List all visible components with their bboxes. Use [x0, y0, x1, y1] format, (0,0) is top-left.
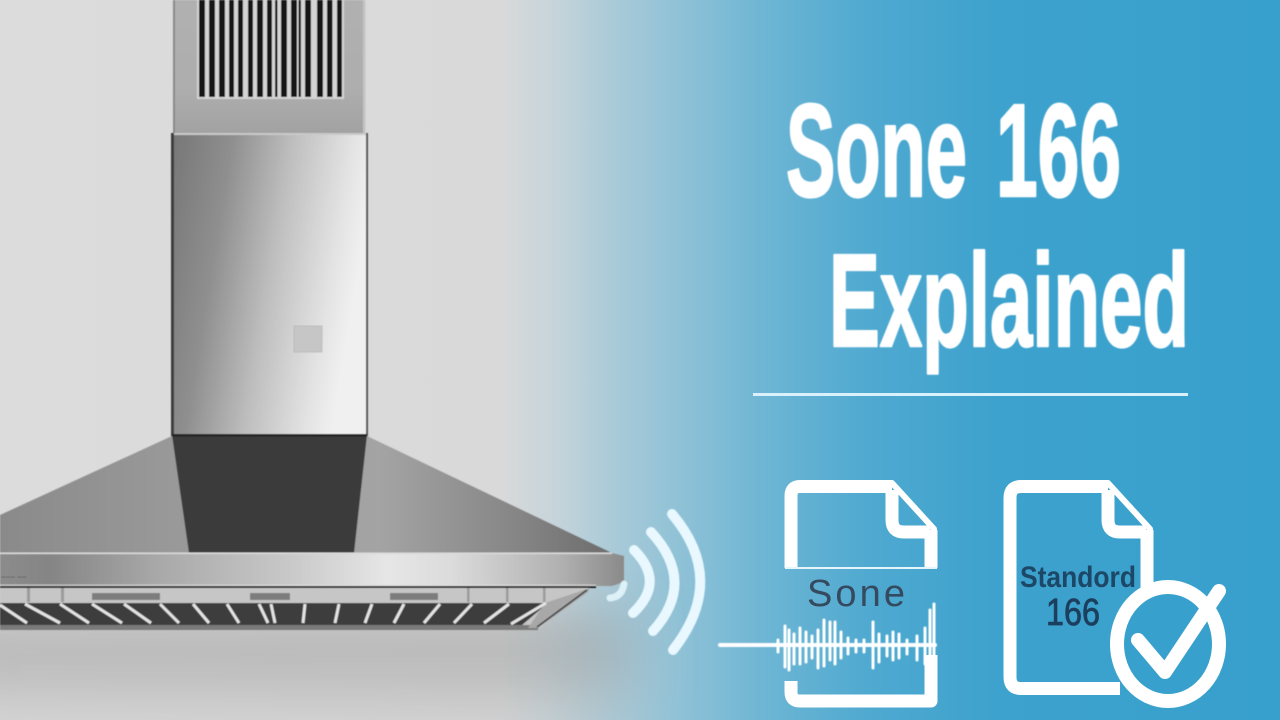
range hood	[0, 0, 624, 630]
icon: sone document with waveform	[720, 483, 937, 701]
title line 1: 166	[996, 77, 1121, 224]
canopy	[0, 436, 612, 553]
hood front band	[0, 552, 624, 588]
filter frame posts	[27, 588, 546, 602]
document outline	[791, 483, 934, 701]
brand mark: ~~~ ~~	[1, 573, 27, 582]
divider line	[753, 393, 1188, 396]
title line 1: Sone	[786, 77, 967, 224]
control panels	[92, 593, 160, 600]
title	[786, 77, 1189, 374]
standard label: Standord	[1020, 561, 1136, 594]
dark duct reflection	[172, 435, 367, 553]
check badge	[1117, 587, 1219, 701]
filter slats	[0, 603, 546, 624]
icon: standard 166 document with check badge	[1010, 483, 1219, 701]
hood underside with filters	[0, 587, 590, 630]
document outline	[1010, 483, 1150, 688]
waveform	[720, 604, 935, 680]
lower chimney duct	[171, 133, 368, 436]
floor shadow under hood	[0, 622, 630, 720]
sound waves icon	[610, 514, 700, 650]
sone label: Sone	[807, 573, 905, 615]
square sensor	[294, 326, 322, 352]
166 label: 166	[1046, 592, 1100, 634]
upper chimney with vent slots	[173, 0, 366, 134]
